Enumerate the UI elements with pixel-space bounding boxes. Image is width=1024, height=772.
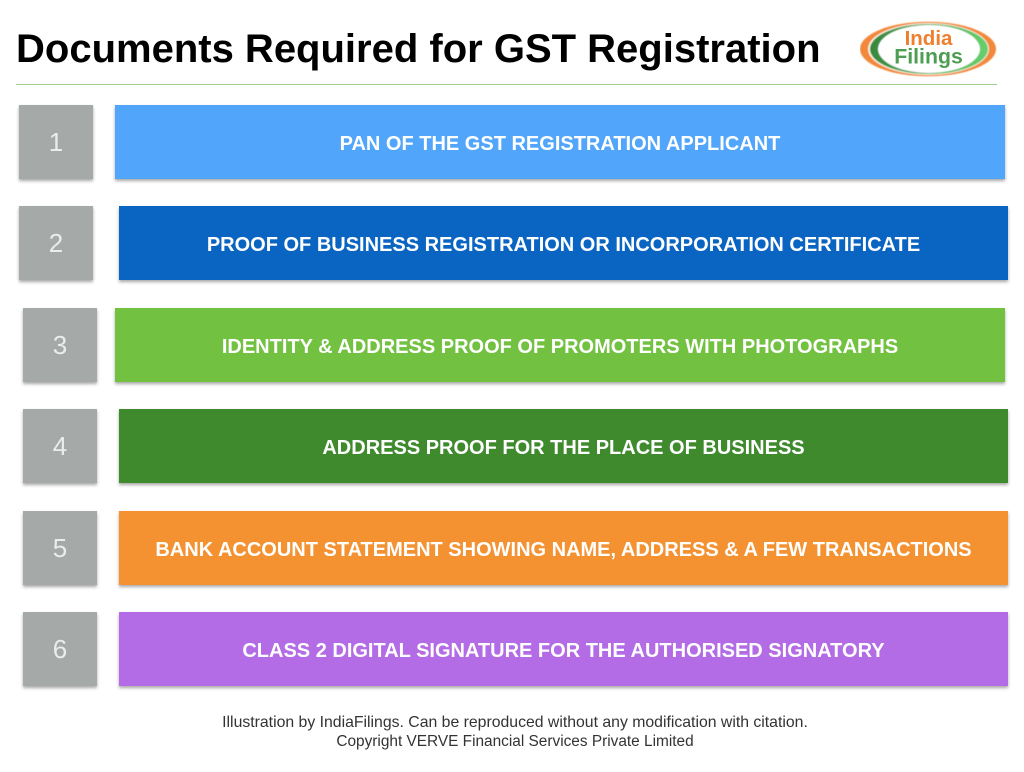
row 2 number	[19, 206, 93, 280]
row 6 bar: CLASS 2 DIGITAL SIGNATURE FOR THE AUTHORISED SIGNATORY	[242, 640, 885, 662]
row 1 bar: PAN OF THE GST REGISTRATION APPLICANT	[340, 133, 780, 155]
row 2 number: 2	[49, 228, 63, 258]
title divider	[16, 84, 997, 85]
row 2 bar: PROOF OF BUSINESS REGISTRATION OR INCORPORATION CERTIFICATE	[207, 234, 920, 256]
row 5 number: 5	[53, 532, 67, 562]
icon: India Filings logo: India	[905, 27, 953, 50]
row 5 bar	[119, 510, 1008, 584]
title: Documents Required for GST Registration	[16, 27, 821, 71]
row 4 bar	[119, 409, 1008, 483]
row 2 bar	[119, 206, 1008, 280]
icon: India Filings logo: Filings	[894, 44, 963, 68]
row 3 bar	[115, 308, 1005, 382]
row 4 number	[23, 409, 97, 483]
row 5 number	[23, 510, 97, 584]
row 4 number: 4	[53, 431, 67, 461]
icon: India Filings logo	[860, 20, 997, 78]
row 4 bar: ADDRESS PROOF FOR THE PLACE OF BUSINESS	[322, 437, 805, 459]
row 1 number: 1	[49, 127, 63, 157]
row 3 number: 3	[53, 330, 67, 360]
row 6 number: 6	[53, 634, 67, 664]
row 3 bar: IDENTITY & ADDRESS PROOF OF PROMOTERS WITH PHOTOGRAPHS	[222, 336, 898, 358]
footer credit: Copyright VERVE Financial Services Private Limited	[336, 733, 694, 750]
row 1 bar	[115, 105, 1005, 179]
row 6 number	[23, 612, 97, 686]
footer credit: Illustration by IndiaFilings. Can be reproduced without any modification with citation.	[222, 714, 808, 731]
row 3 number	[23, 308, 97, 382]
row 1 number	[19, 105, 93, 179]
row 6 bar	[119, 612, 1008, 686]
footer credit	[222, 714, 808, 750]
row 5 bar: BANK ACCOUNT STATEMENT SHOWING NAME, ADDRESS & A FEW TRANSACTIONS	[155, 538, 972, 560]
